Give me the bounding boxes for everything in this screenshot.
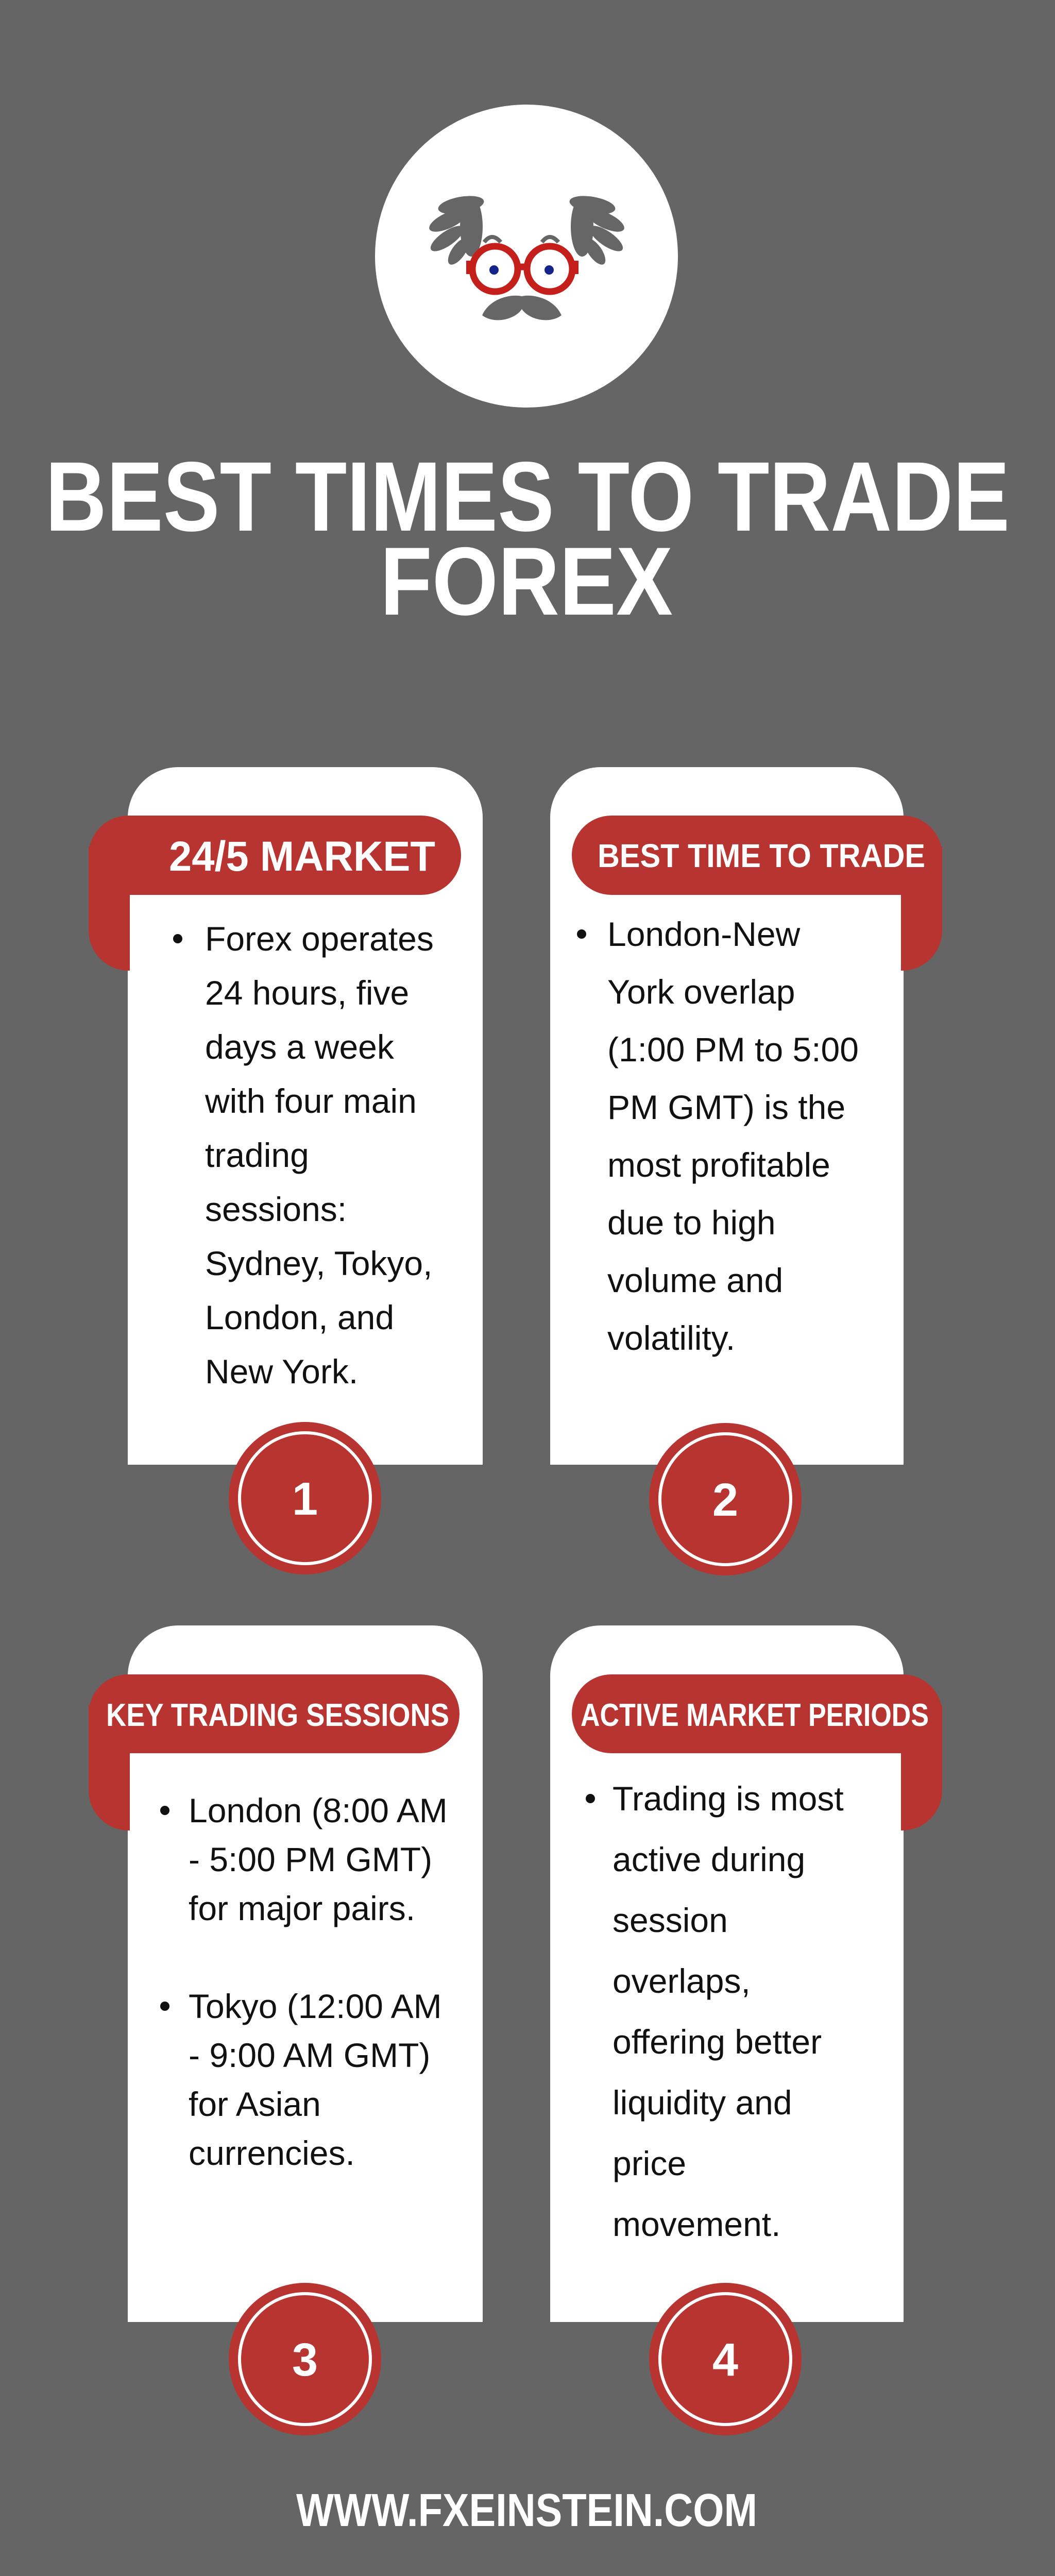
- panel: card 2: [550, 767, 942, 1575]
- text block: card 1: New York.: [205, 1352, 358, 1391]
- text block: card 2: volatility.: [607, 1319, 735, 1357]
- text block: card 2: London-New: [607, 915, 800, 953]
- text block: card 1: trading: [205, 1136, 309, 1174]
- badge: 1: 1: [292, 1473, 318, 1525]
- text block: card 1: with four main: [205, 1082, 417, 1120]
- panel: card 1: [89, 767, 483, 1574]
- header: 24/5 market: [89, 816, 461, 971]
- text block: card 4: active during: [612, 1840, 805, 1878]
- header: best time to trade: BEST TIME TO TRADE: [598, 837, 925, 874]
- text block: card 1: London, and: [205, 1298, 394, 1336]
- text block: card 4: [586, 1780, 844, 2243]
- text block: card 2: York overlap: [607, 973, 795, 1011]
- text block: card 4: session: [612, 1901, 728, 1939]
- text block: card 3: for major pairs.: [189, 1889, 415, 1927]
- header: active market periods: [572, 1674, 942, 1831]
- logo circle: [375, 105, 678, 408]
- text block: card 1: [173, 767, 934, 1575]
- badge: 3: 3: [292, 2334, 318, 2386]
- badge: 4: 4: [712, 2334, 738, 2386]
- text block: card 2: volume and: [607, 1261, 783, 1299]
- text block: card 1: 24 hours, five: [205, 974, 409, 1012]
- text block: card 4: liquidity and: [612, 2083, 792, 2122]
- text block: card 4: overlaps,: [612, 1962, 751, 2000]
- text block: card 1: sessions:: [205, 1190, 347, 1228]
- text block: card 2: (1:00 PM to 5:00: [607, 1030, 859, 1069]
- badge: 1: [229, 1422, 381, 1574]
- text block: card 3: London (8:00 AM: [189, 1791, 448, 1829]
- panel: card 3: [89, 1625, 483, 2435]
- badge: 2: [649, 1423, 802, 1575]
- text block: card 4: Trading is most: [612, 1780, 844, 1818]
- text block: card 4: movement.: [612, 2205, 780, 2243]
- header: 24/5 market: 24/5 MARKET: [169, 833, 435, 880]
- text block: card 3: - 5:00 PM GMT): [189, 1840, 432, 1878]
- text block: card 3: [160, 1625, 942, 2435]
- text block: card 2: most profitable: [607, 1146, 830, 1184]
- title: [45, 441, 1010, 629]
- logo icon: einstein face: [429, 196, 624, 320]
- text block: card 2: PM GMT) is the: [607, 1088, 845, 1126]
- text block: card 1: Forex operates: [205, 920, 434, 958]
- badge: 4: [649, 2283, 802, 2435]
- text block: card 1: days a week: [205, 1028, 394, 1066]
- badge: 3: [229, 2283, 381, 2435]
- text block: card 4: offering better: [612, 2023, 822, 2061]
- panel: card 4: [550, 1625, 942, 2435]
- header: key trading sessions: [89, 1674, 460, 1831]
- text block: card 1: Sydney, Tokyo,: [205, 1244, 432, 1282]
- header: best time to trade: [572, 816, 942, 971]
- text block: card 3: - 9:00 AM GMT): [189, 2036, 430, 2074]
- text block: card 2: [577, 915, 859, 1357]
- text block: card 3: Tokyo (12:00 AM: [189, 1987, 442, 2025]
- badge: 2: 2: [712, 1475, 738, 1526]
- text block: card 3: for Asian: [189, 2085, 321, 2123]
- footer url: WWW.FXEINSTEIN.COM: [296, 2485, 757, 2536]
- text block: card 3: currencies.: [189, 2134, 355, 2172]
- text block: card 4: price: [612, 2144, 686, 2182]
- text block: card 2: due to high: [607, 1204, 776, 1242]
